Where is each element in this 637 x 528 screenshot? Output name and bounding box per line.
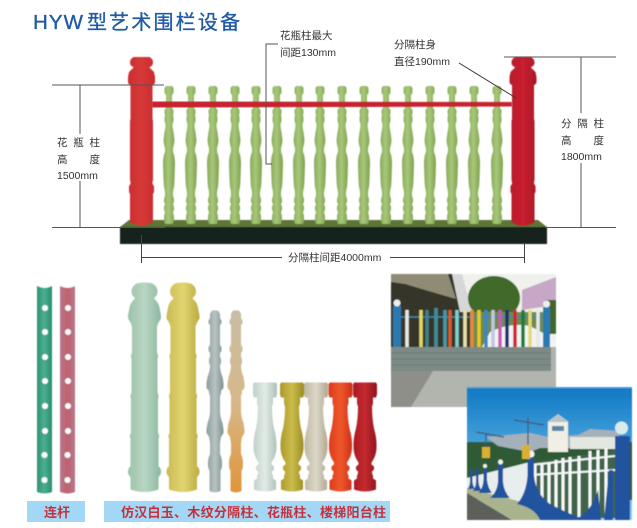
background roofs: [486, 429, 622, 452]
title: HYW: [33, 11, 84, 34]
crimson baluster: [353, 382, 377, 492]
dimension: post height: 高 度: [561, 134, 604, 147]
label: rods: 连杆: [44, 505, 70, 520]
column samples: [128, 282, 377, 492]
dimension: baluster height: 1500mm: [57, 170, 98, 182]
white wall: [467, 462, 530, 505]
jade column: [128, 282, 161, 492]
dimension: max spacing: 间距130mm: [280, 46, 336, 59]
blue posts: [468, 436, 630, 520]
orange red baluster: [328, 382, 352, 492]
dimension: baluster height: 花瓶柱: [57, 136, 100, 149]
label: rods: [27, 501, 85, 522]
white marble baluster: [253, 382, 277, 492]
olive baluster: [280, 382, 304, 492]
orange marble slim column: [228, 310, 244, 492]
connecting rods: [37, 286, 75, 494]
dimension: post spacing: 分隔柱间距4000mm: [288, 251, 382, 264]
dimension: post height: 1800mm: [561, 151, 602, 163]
grey marble slim column: [206, 310, 224, 492]
background trees: [467, 442, 632, 500]
beige marble baluster: [304, 382, 328, 492]
left red post: [128, 57, 155, 226]
pink rod: [60, 286, 75, 494]
green balusters: [163, 86, 503, 224]
dimension: post diameter: 分隔柱身: [394, 38, 436, 51]
photo: blue and white villa fence: [467, 387, 632, 520]
right red post: [510, 57, 536, 226]
dimension: post height: 分隔柱: [561, 117, 604, 130]
base slab: [120, 220, 547, 244]
dimension: max spacing: 花瓶柱最大: [280, 29, 333, 42]
dimension: post diameter: 直径190mm: [394, 55, 450, 68]
red rail: [152, 102, 512, 108]
photo: colourful street fence: [391, 274, 556, 407]
green rod: [37, 286, 52, 494]
panel: fence diagram: [120, 57, 547, 244]
dimension: max spacing: [266, 29, 336, 164]
dimension: baluster height: [52, 85, 165, 228]
label: columns: 仿汉白玉、木纹分隔柱、花瓶柱、楼梯阳台柱: [121, 505, 386, 520]
road and curb: [467, 493, 512, 520]
coloured posts: [407, 308, 538, 347]
title: 型艺术围栏设备: [87, 11, 240, 34]
yellow column: [166, 282, 200, 492]
dimension: baluster height: 高 度: [57, 153, 100, 166]
white pickets: [530, 450, 615, 518]
label: columns: [104, 501, 390, 522]
dimension: post spacing: [141, 235, 524, 264]
dimension: post diameter: [394, 38, 516, 98]
dimension: post height: [504, 57, 616, 228]
